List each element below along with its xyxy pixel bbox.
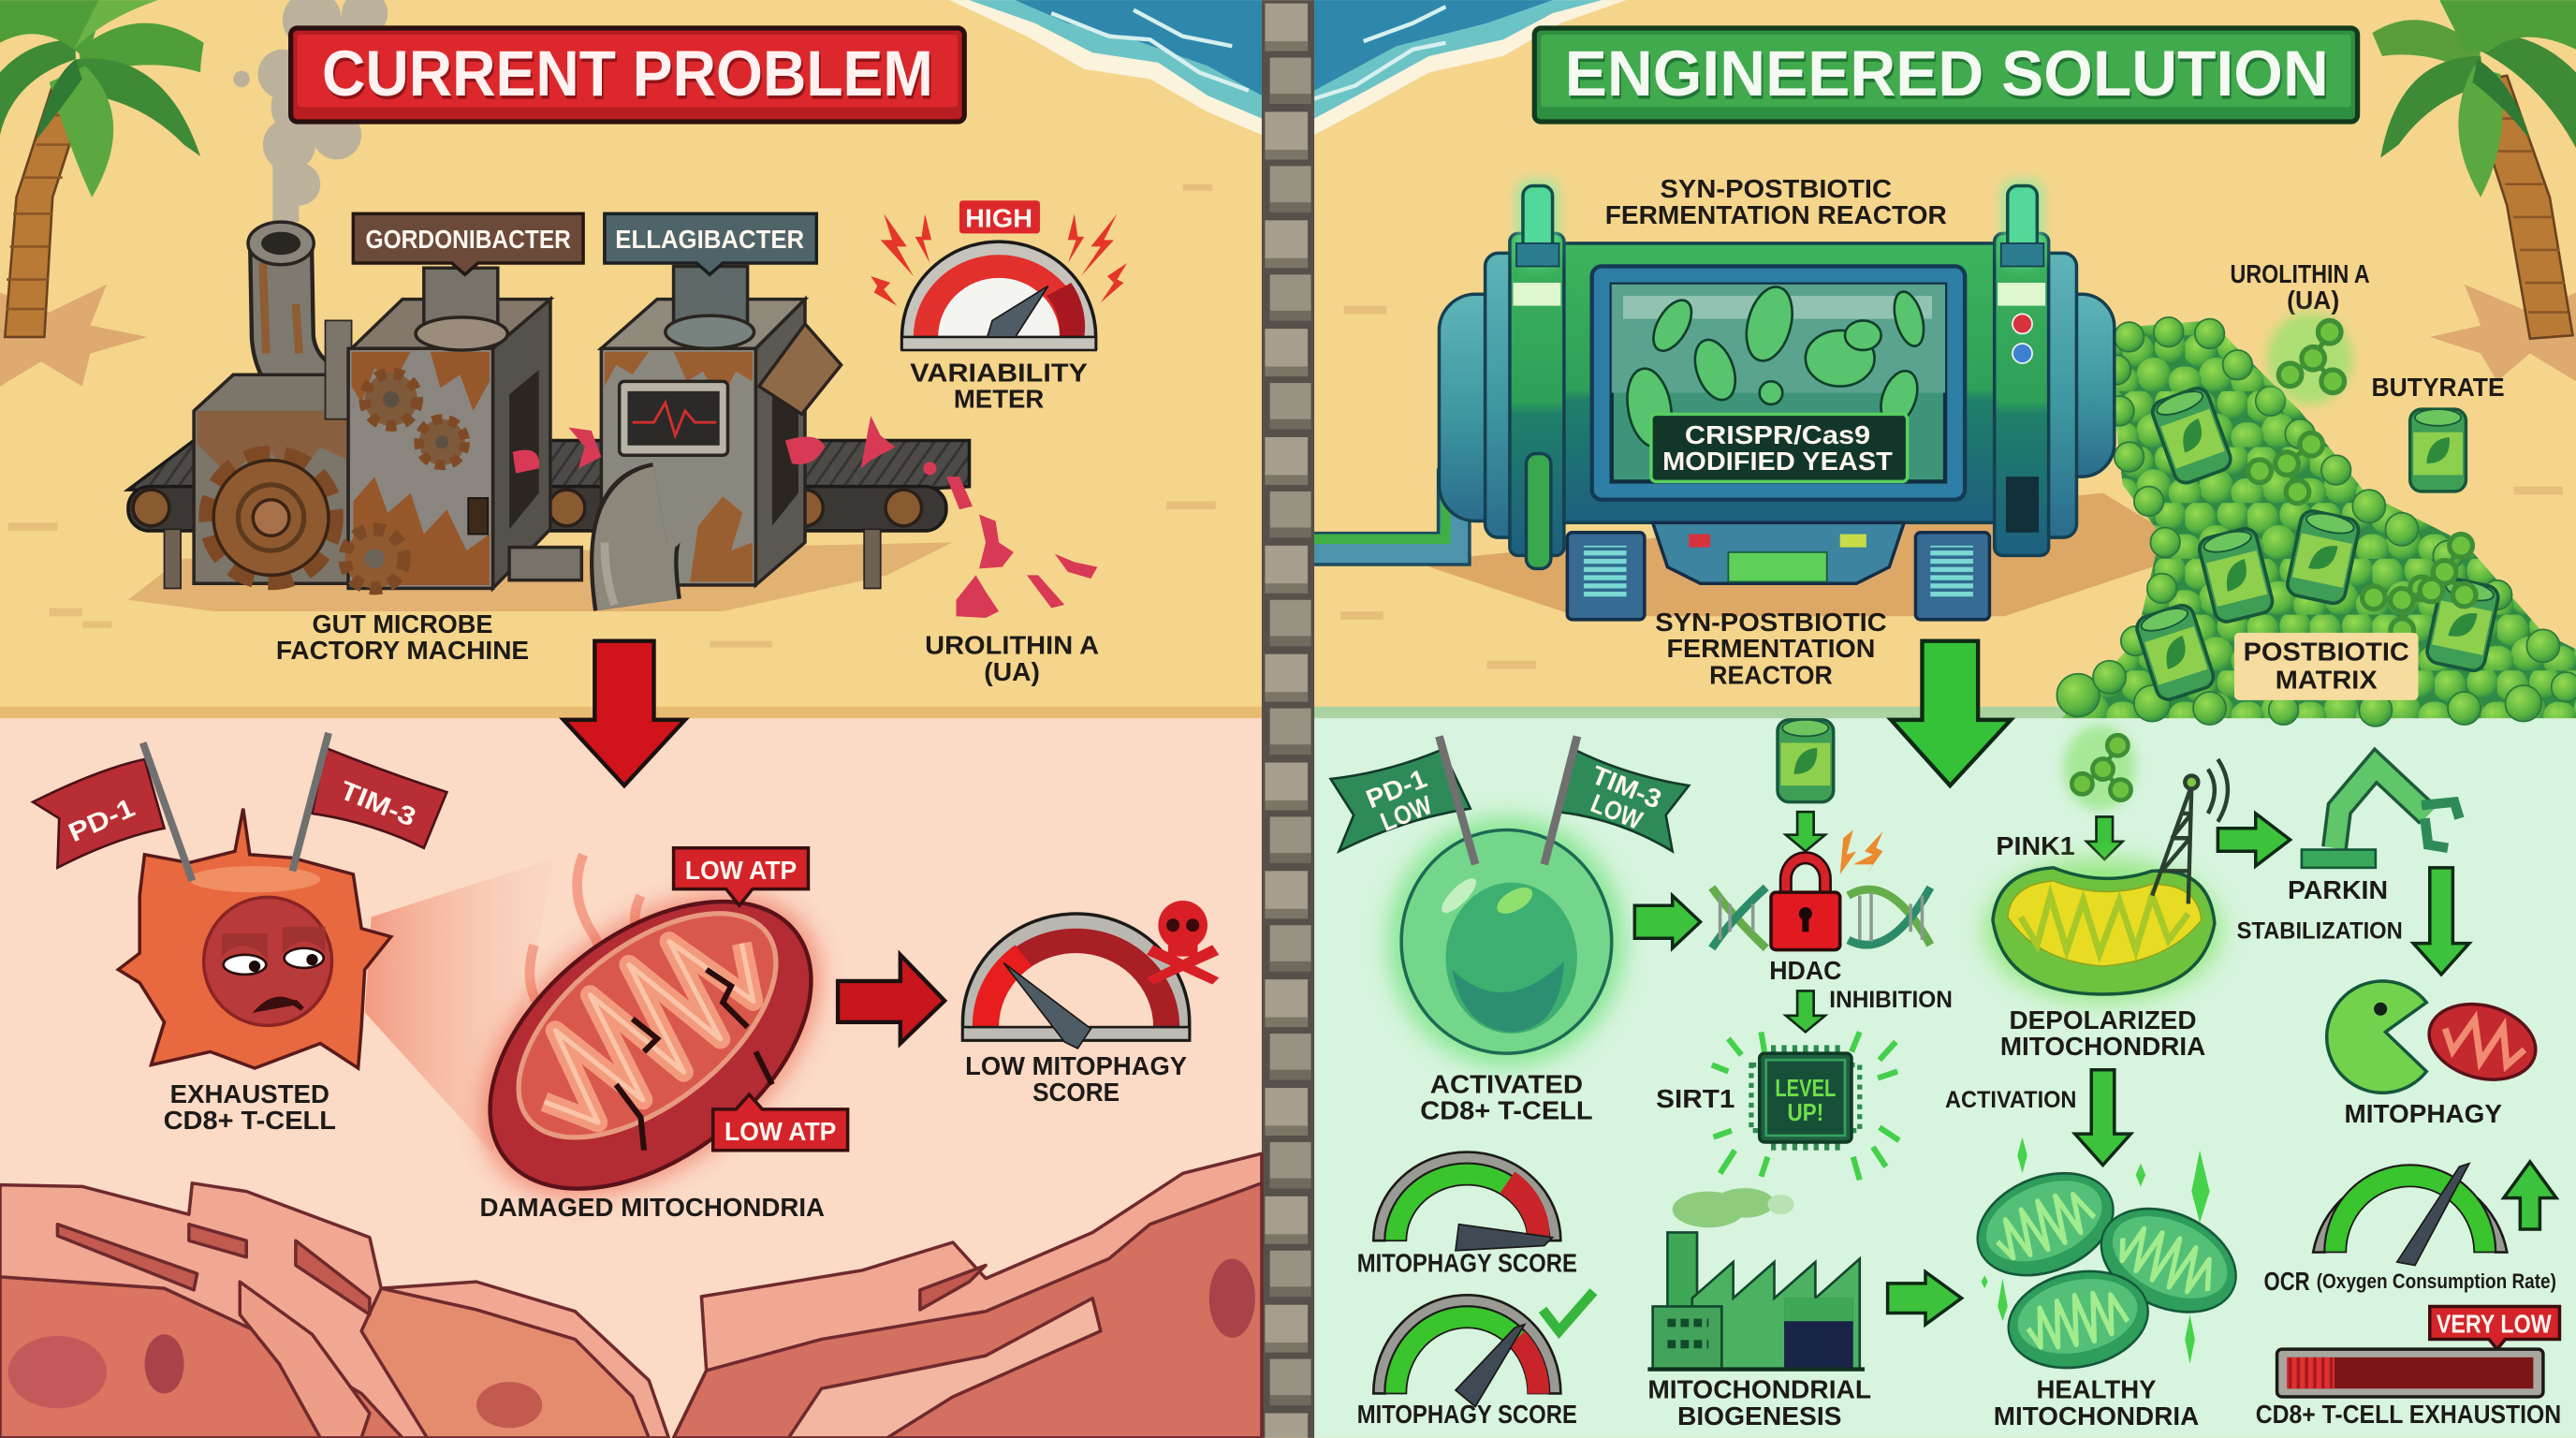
label: depolarized mitochondria bbox=[2000, 1005, 2205, 1061]
icon: butyrate can small bbox=[1778, 720, 1834, 802]
green arrow: can to lock bbox=[1786, 812, 1825, 851]
label: urolithin A bbox=[925, 631, 1099, 686]
sign: gordonibacter bbox=[353, 213, 583, 274]
damaged mitochondria bbox=[425, 832, 876, 1257]
reactor green bands bbox=[1510, 233, 2049, 555]
label: low mitophagy score: SCORE bbox=[1032, 1078, 1120, 1107]
label: gut microbe factory machine: FACTORY MACHINE bbox=[276, 636, 529, 665]
label: damaged mitochondria: DAMAGED MITOCHONDRIA bbox=[479, 1193, 825, 1222]
label: inhibition: INHIBITION bbox=[1829, 988, 1953, 1013]
label: exhausted CD8+ T-cell: CD8+ T-CELL bbox=[164, 1106, 336, 1135]
reactor control panel bbox=[1653, 522, 1904, 583]
title: engineered solution: ENGINEERED SOLUTION bbox=[1566, 40, 2331, 112]
label: butyrate: BUTYRATE bbox=[2371, 373, 2505, 402]
orange sparks bbox=[1840, 829, 1882, 874]
reactor shadow bbox=[1429, 493, 2185, 616]
label: urolithin A right: UROLITHIN A bbox=[2231, 259, 2370, 288]
flag: PD-1: PD-1 bbox=[64, 793, 139, 847]
background: sand beach left bbox=[0, 0, 1262, 710]
label box: CRISPR/Cas9 modified yeast bbox=[1651, 414, 1908, 481]
label: stabilization: STABILIZATION bbox=[2237, 918, 2403, 944]
callout: low ATP bottom bbox=[713, 1094, 848, 1151]
gut microbe factory machine bbox=[128, 213, 973, 611]
red right arrow bbox=[838, 955, 944, 1044]
icon: DNA right bbox=[1848, 888, 1930, 945]
label: gut microbe factory machine: GUT MICROBE bbox=[312, 609, 493, 638]
label: low mitophagy score: LOW MITOPHAGY bbox=[965, 1051, 1187, 1080]
warning lightning bolts bbox=[871, 213, 1127, 306]
activated CD8+ T-cell bbox=[1388, 816, 1625, 1066]
chimney pipe bbox=[248, 222, 337, 403]
urolithin pieces on belt bbox=[513, 416, 973, 509]
title: current problem: CURRENT PROBLEM bbox=[322, 37, 933, 110]
right tower bbox=[601, 266, 842, 585]
green arrow: parkin to mitophagy bbox=[2413, 868, 2469, 975]
exhaustion bar bbox=[2277, 1349, 2543, 1397]
tired face bbox=[222, 927, 326, 1009]
label: activated CD8+ T-cell: CD8+ T-CELL bbox=[1420, 1095, 1593, 1124]
green arrow: biogenesis to healthy bbox=[1888, 1272, 1962, 1325]
left low box bbox=[194, 374, 348, 583]
label: urolithin A: (UA) bbox=[984, 657, 1040, 686]
label: mitophagy score 1: MITOPHAGY SCORE bbox=[1357, 1249, 1577, 1278]
ocean left bbox=[949, 0, 1262, 135]
icon: parkin robot arm bbox=[2302, 766, 2459, 868]
postbiotic matrix pile bbox=[2056, 317, 2576, 726]
icon: biogenesis factory bbox=[1647, 1188, 1865, 1372]
gauge: mitophagy score low bbox=[1373, 1152, 1560, 1251]
background: sand beach right bbox=[1314, 0, 2576, 710]
feed pipe bbox=[1314, 468, 1454, 549]
cans in matrix bbox=[2134, 385, 2500, 702]
callout: very low bbox=[2430, 1306, 2559, 1349]
antenna bbox=[2152, 759, 2228, 903]
icon: skull and crossbones bbox=[1147, 901, 1219, 984]
smoke from chimney bbox=[233, 0, 388, 222]
label: reactor top bbox=[1605, 174, 1947, 229]
label: postbiotic matrix: MATRIX bbox=[2276, 666, 2378, 695]
label box: CRISPR/Cas9 modified yeast: CRISPR/Cas9 bbox=[1685, 420, 1870, 449]
label box: CRISPR/Cas9 modified yeast: MODIFIED YEAST bbox=[1662, 447, 1893, 476]
label: parkin: PARKIN bbox=[2288, 875, 2388, 904]
healthy mitochondria trio bbox=[1962, 1137, 2252, 1380]
heat flames bbox=[529, 855, 655, 1068]
gauge: OCR bbox=[2313, 1164, 2507, 1266]
label: OCR oxygen consumption rate: OCR bbox=[2264, 1267, 2310, 1296]
exhausted CD8+ T-cell bbox=[118, 809, 391, 1068]
label: variability meter: VARIABILITY bbox=[910, 358, 1088, 387]
flag: TIM-3 low: TIM-3 bbox=[1588, 760, 1665, 814]
urolithin pieces falling bbox=[956, 514, 1097, 618]
flag: TIM-3 low: LOW bbox=[1587, 788, 1647, 835]
molecules in matrix bbox=[2243, 417, 2476, 646]
big rusty gear bbox=[207, 454, 335, 581]
label: OCR oxygen consumption rate bbox=[2264, 1267, 2556, 1296]
sign: ellagibacter: ELLAGIBACTER bbox=[615, 225, 804, 254]
label: urolithin A right: (UA) bbox=[2287, 286, 2339, 315]
matrix edge spheres bbox=[2056, 317, 2576, 726]
label: reactor top: FERMENTATION REACTOR bbox=[1605, 200, 1947, 229]
green arrow: activation bbox=[2075, 1070, 2130, 1166]
title: engineered solution: ENGINEERED SOLUTION bbox=[1565, 37, 2329, 110]
reactor window with yeast bbox=[1592, 266, 1965, 500]
background: pink problem tissue zone bbox=[0, 718, 1262, 1438]
label: healthy mitochondria: HEALTHY bbox=[2036, 1375, 2157, 1404]
label: activation: ACTIVATION bbox=[1945, 1088, 2076, 1113]
sign: ellagibacter bbox=[605, 213, 816, 274]
label: mitochondrial biogenesis: MITOCHONDRIAL bbox=[1647, 1375, 1871, 1404]
flag: PD-1 low: PD-1 bbox=[1362, 764, 1431, 814]
green arrow: mitochondria to parkin bbox=[2217, 814, 2291, 866]
conveyor belt bbox=[128, 441, 970, 588]
label: reactor bottom: FERMENTATION bbox=[1667, 634, 1875, 663]
label: mitochondrial biogenesis bbox=[1647, 1375, 1871, 1431]
label: reactor bottom bbox=[1655, 608, 1887, 689]
label: healthy mitochondria: MITOCHONDRIA bbox=[1994, 1401, 2199, 1431]
callout: low ATP top bbox=[674, 848, 809, 905]
low mitophagy gauge bbox=[962, 914, 1190, 1049]
front elbow pipe bbox=[509, 506, 661, 605]
green arrow: HDAC to SIRT1 bbox=[1786, 990, 1825, 1032]
label: exhausted CD8+ T-cell: EXHAUSTED bbox=[170, 1079, 329, 1108]
icon: DNA left bbox=[1712, 888, 1766, 948]
checkmark bbox=[1543, 1292, 1593, 1331]
yeast cells bbox=[1621, 282, 1929, 450]
monitor with heartbeat bbox=[620, 381, 728, 455]
label: exhausted CD8+ T-cell bbox=[164, 1079, 336, 1135]
center stone wall divider bbox=[1262, 0, 1314, 1438]
icon: butyrate can bbox=[2410, 409, 2466, 492]
variability meter gauge bbox=[871, 200, 1127, 350]
palm tree right bbox=[2372, 0, 2576, 381]
icon: level up chip: UP! bbox=[1788, 1100, 1823, 1126]
green down arrow bbox=[1891, 641, 2011, 785]
icon: level up chip: LEVEL bbox=[1775, 1076, 1836, 1102]
palm tree left bbox=[0, 0, 204, 387]
fermentation reactor bbox=[1314, 179, 2115, 620]
label: low mitophagy score bbox=[965, 1051, 1187, 1107]
title: current problem: CURRENT PROBLEM bbox=[324, 40, 935, 112]
reactor vent towers bbox=[1516, 179, 2043, 266]
label: gut microbe factory machine bbox=[276, 609, 529, 665]
label: reactor bottom: REACTOR bbox=[1709, 660, 1833, 689]
green arrow: T-cell to HDAC bbox=[1634, 896, 1701, 948]
label: mitophagy score 2: MITOPHAGY SCORE bbox=[1357, 1400, 1577, 1429]
flag: TIM-3 bbox=[292, 733, 446, 871]
label: reactor bottom: SYN-POSTBIOTIC bbox=[1655, 608, 1887, 637]
icon: urolithin molecule bbox=[2267, 313, 2352, 404]
callout: low ATP top: LOW ATP bbox=[685, 856, 797, 885]
bottom tissue background bbox=[0, 1153, 1262, 1438]
icon: level up chip bbox=[1712, 1032, 1899, 1180]
callout: low ATP bottom: LOW ATP bbox=[724, 1117, 836, 1146]
label: variability meter: METER bbox=[954, 384, 1044, 413]
flag: PD-1 low bbox=[1331, 736, 1475, 864]
reactor legs bbox=[1567, 533, 1989, 620]
label: activated CD8+ T-cell bbox=[1420, 1069, 1593, 1124]
high tag: HIGH bbox=[965, 203, 1032, 232]
sign: gordonibacter: GORDONIBACTER bbox=[366, 225, 571, 254]
small rusty gears bbox=[345, 374, 465, 588]
label: depolarized mitochondria: DEPOLARIZED bbox=[2009, 1005, 2197, 1034]
sparkles bbox=[1982, 1137, 2210, 1364]
icon: molecule over depolarized mitochondria bbox=[2063, 725, 2136, 810]
label: PINK1: PINK1 bbox=[1996, 831, 2075, 860]
label: healthy mitochondria bbox=[1994, 1375, 2199, 1431]
label: mitophagy: MITOPHAGY bbox=[2345, 1099, 2502, 1128]
coil bbox=[1526, 454, 1551, 568]
zoom beam from T-cell to mitochondria bbox=[365, 858, 555, 1153]
depolarized mitochondria bbox=[1984, 759, 2228, 1003]
label: postbiotic matrix bbox=[2234, 633, 2419, 700]
label: depolarized mitochondria: MITOCHONDRIA bbox=[2000, 1032, 2205, 1061]
green up arrow bbox=[2504, 1162, 2556, 1229]
label: activated CD8+ T-cell: ACTIVATED bbox=[1430, 1069, 1583, 1098]
machine ground shadow bbox=[128, 542, 953, 611]
label: mitochondrial biogenesis: BIOGENESIS bbox=[1677, 1401, 1841, 1431]
flag: TIM-3: TIM-3 bbox=[336, 775, 420, 832]
left tower bbox=[326, 268, 550, 588]
label: urolithin A: UROLITHIN A bbox=[925, 631, 1099, 660]
label: HDAC: HDAC bbox=[1769, 956, 1841, 985]
label: reactor top: SYN-POSTBIOTIC bbox=[1661, 174, 1892, 203]
green arrow: into mitochondria bbox=[2086, 816, 2123, 859]
flag: TIM-3 low bbox=[1544, 736, 1689, 864]
label: SIRT1: SIRT1 bbox=[1656, 1084, 1734, 1113]
label: postbiotic matrix: POSTBIOTIC bbox=[2244, 638, 2409, 667]
flag: PD-1 bbox=[33, 742, 192, 881]
flag: PD-1 low: LOW bbox=[1376, 790, 1437, 837]
ocean right bbox=[1314, 0, 1627, 135]
icon: HDAC padlock bbox=[1771, 858, 1840, 950]
background: green solution zone bbox=[1314, 718, 2576, 1438]
icon: pac-man mitophagy bbox=[2327, 981, 2544, 1093]
gauge: mitophagy score improved bbox=[1373, 1292, 1593, 1407]
mitochondria cracks bbox=[616, 970, 772, 1151]
label: variability meter bbox=[910, 358, 1088, 413]
label: urolithin A right bbox=[2231, 259, 2370, 315]
red down arrow bbox=[564, 641, 685, 785]
callout: very low: VERY LOW bbox=[2437, 1310, 2552, 1339]
